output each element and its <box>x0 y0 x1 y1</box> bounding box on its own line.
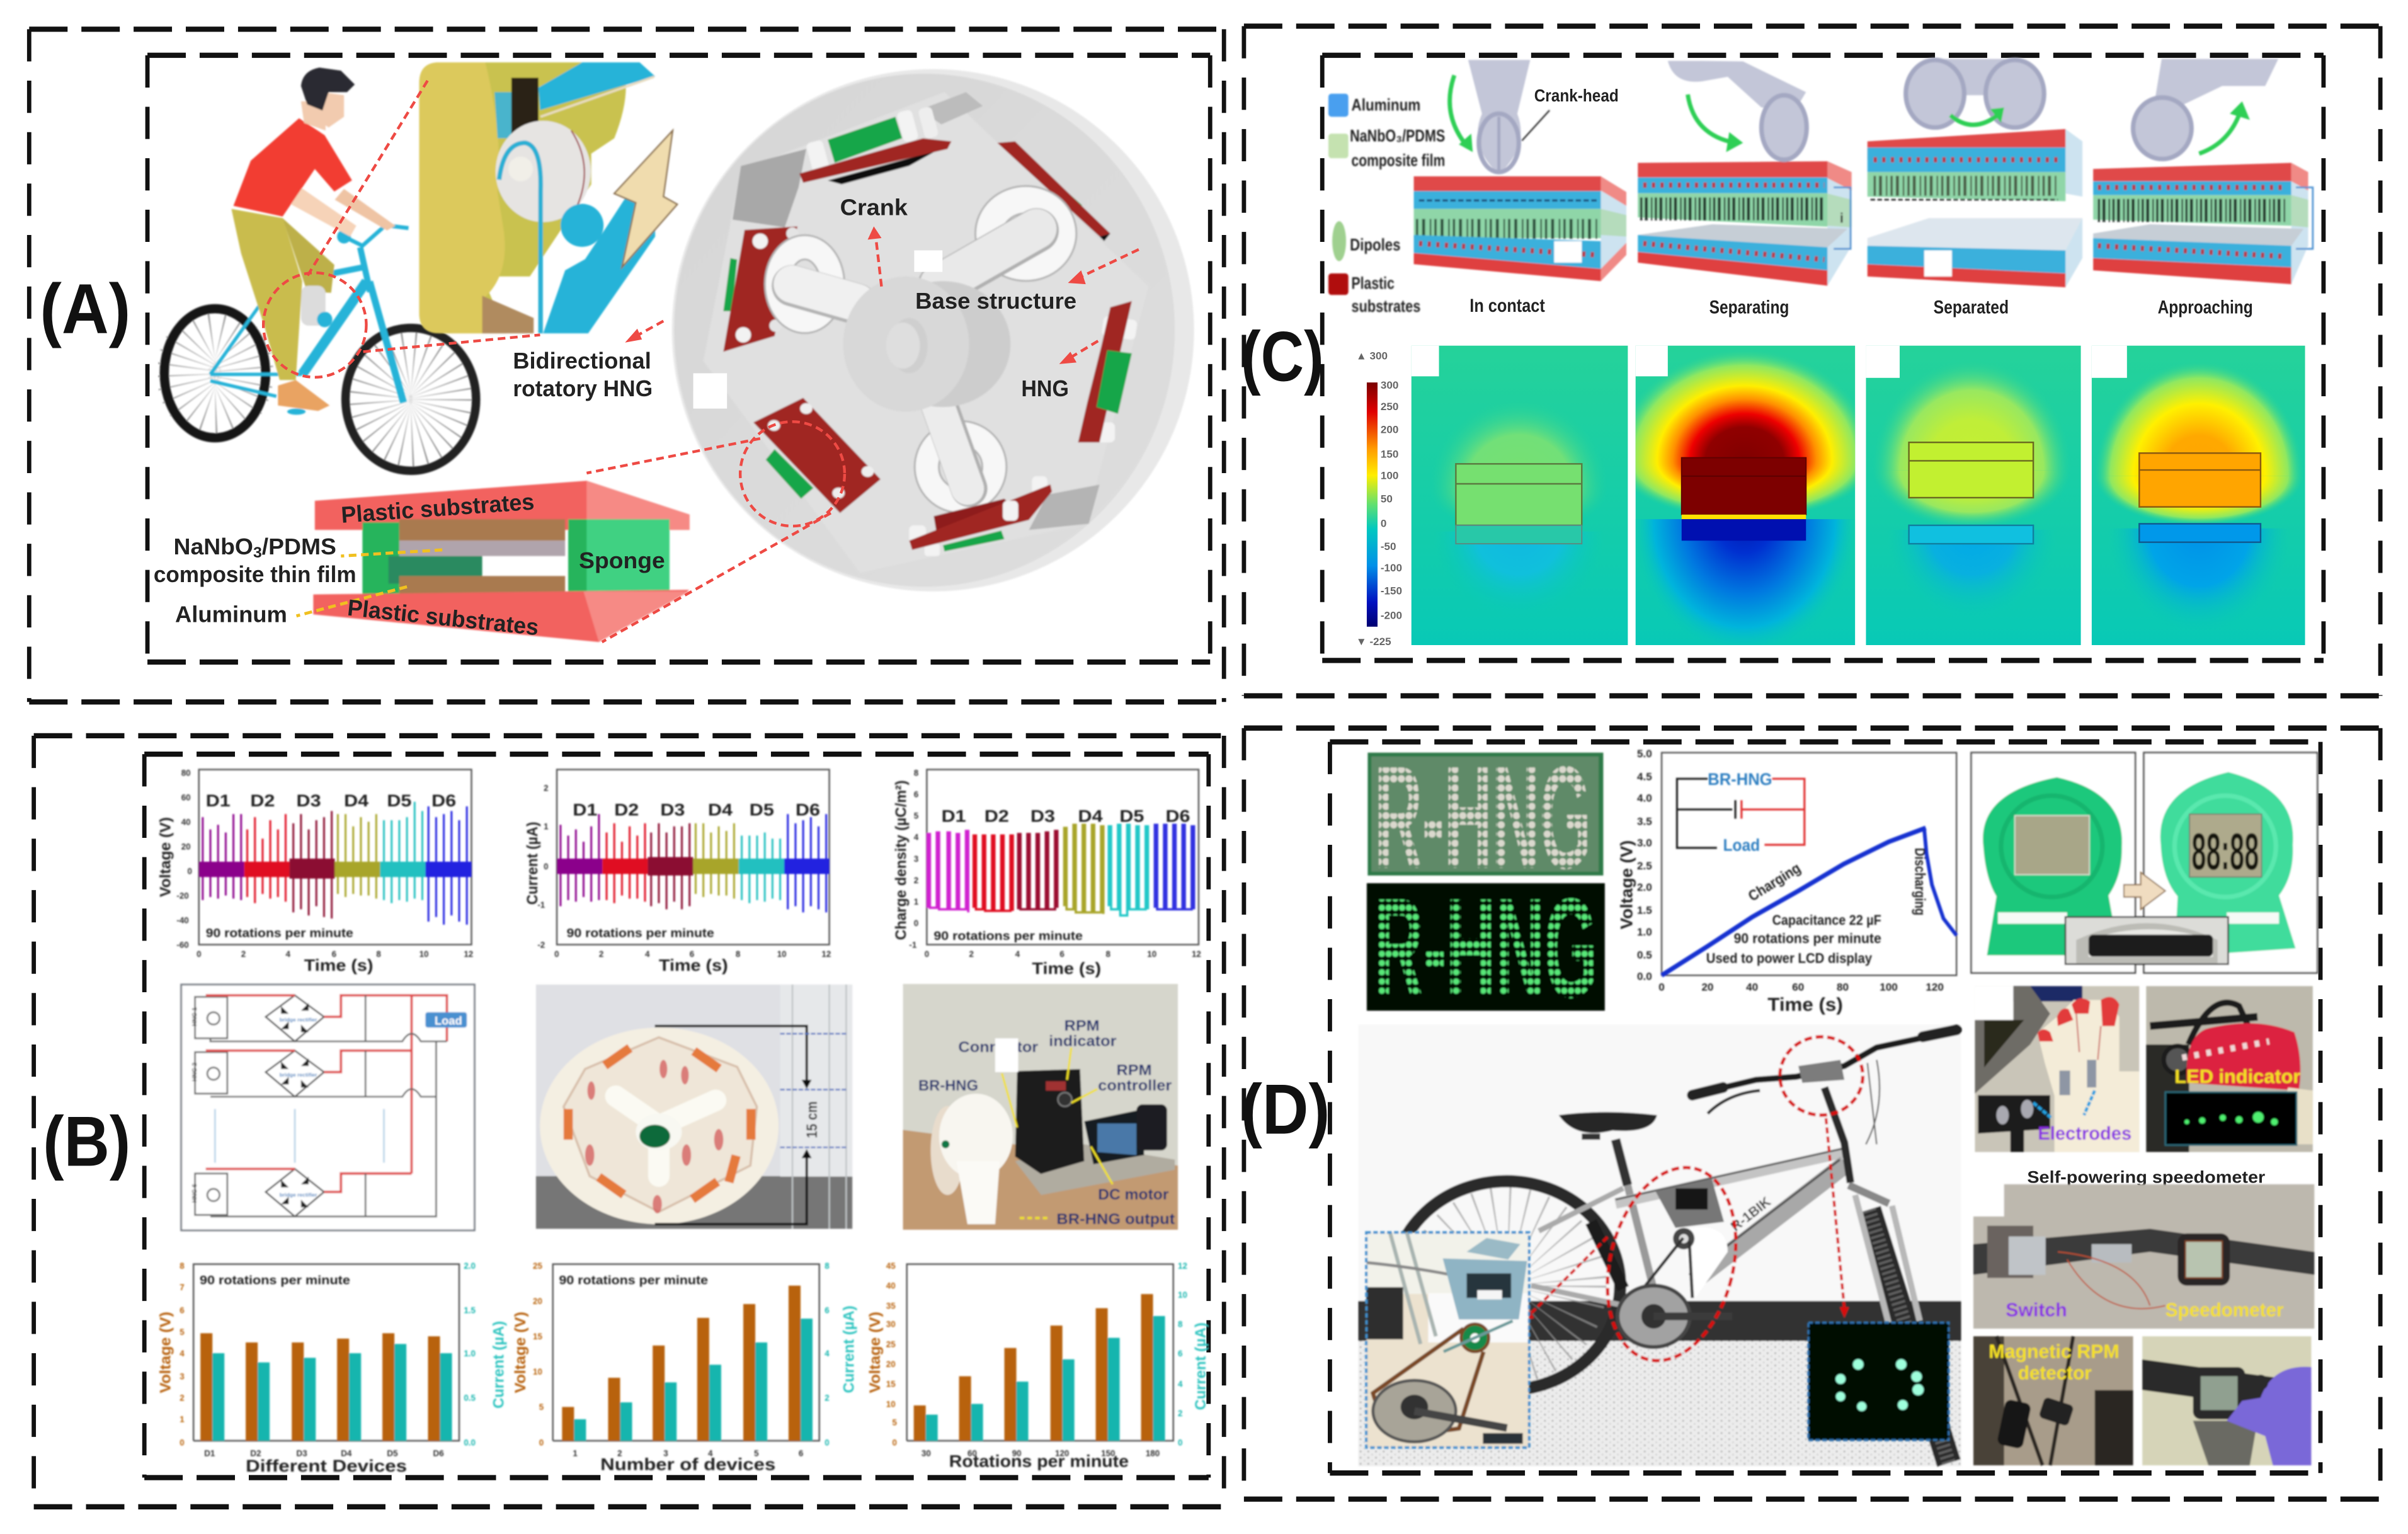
bar chart: voltage and current by device: D3 <box>297 1448 307 1458</box>
bar chart: voltage and current by number of devices: Current (µA) <box>841 1305 858 1393</box>
label: NaNbO3/PDMS composite thin film: NaNbO <box>174 534 251 559</box>
heading (A): (A) <box>40 269 130 348</box>
bar chart: voltage and current by device: 0.5 <box>464 1394 476 1403</box>
bar chart: voltage and current by device: 2 <box>180 1394 185 1403</box>
chart: voltage of six devices <box>157 768 473 975</box>
photo: bicycle with mounted device: R-1BIK <box>1728 1194 1774 1234</box>
photo: test rig with motor and labels: BR-HNG <box>918 1077 978 1094</box>
chart: voltage of six devices: 10 <box>419 949 429 959</box>
bar chart: voltage and current by rotation speed: 120 <box>1055 1448 1069 1458</box>
bar chart: voltage and current by device: 6 <box>180 1306 185 1315</box>
chart: current of six devices: 2 <box>544 784 549 793</box>
bar chart: voltage and current by device: 5 <box>180 1327 185 1337</box>
illustration: rotary disc with crank and HNG modules <box>672 69 1194 592</box>
photo: LED board unlit <box>1367 736 1603 900</box>
heading (C): (C) <box>1241 317 1324 396</box>
circuit diagram: six HNG rectifiers to load <box>181 985 474 1230</box>
bar chart: voltage and current by rotation speed: 2 <box>1178 1409 1183 1418</box>
chart: charge density of six devices: D2 <box>984 806 1009 825</box>
chart: voltage of six devices: 90 rotations per minute <box>206 926 353 940</box>
potential map: In contact <box>1412 346 1628 645</box>
bar chart: voltage and current by rotation speed: 4 <box>1178 1380 1183 1389</box>
chart: charge density of six devices: 4 <box>914 833 919 842</box>
inset: close-up of chain and device mount <box>1366 1232 1529 1448</box>
chart: charge density of six devices: D4 <box>1078 806 1103 825</box>
chart: charge density of six devices: 6 <box>1059 949 1064 959</box>
chart: voltage of six devices: 6 <box>332 949 336 959</box>
bar chart: voltage and current by device: Current (µA) <box>491 1321 508 1409</box>
bar chart: voltage and current by rotation speed: 8 <box>1178 1320 1183 1329</box>
chart: current of six devices: 8 <box>736 949 741 959</box>
bar chart: voltage and current by rotation speed: 25 <box>886 1339 896 1349</box>
chart: capacitor charging and discharging: 90 rotations per minute <box>1734 930 1881 946</box>
colour scale: 150 <box>1381 449 1398 461</box>
diagram: Separating state: i <box>1840 210 1844 226</box>
chart: capacitor charging and discharging: 20 <box>1701 982 1713 993</box>
potential map: Separated <box>1866 346 2081 645</box>
bar chart: voltage and current by number of devices: 8 <box>825 1261 830 1271</box>
chart: capacitor charging and discharging: 2.5 <box>1637 860 1652 872</box>
chart: voltage of six devices: D5 <box>387 791 412 810</box>
chart: current of six devices: D1 <box>573 801 598 820</box>
chart: capacitor charging and discharging <box>1618 748 1956 1015</box>
legend: materials: composite film <box>1352 151 1445 169</box>
bar chart: voltage and current by device: 0.0 <box>464 1438 476 1447</box>
chart: capacitor charging and discharging: Discharging <box>1912 848 1928 915</box>
bar chart: voltage and current by number of devices: 0 <box>825 1438 830 1447</box>
legend: materials <box>1328 94 1445 316</box>
potential map: Separating <box>1635 345 1856 645</box>
chart: capacitor charging and discharging: BR-HNG <box>1708 770 1772 789</box>
chart: voltage of six devices: 60 <box>181 793 191 802</box>
chart: voltage of six devices: Voltage (V) <box>157 817 174 897</box>
chart: current of six devices: 10 <box>777 949 787 959</box>
chart: charge density of six devices: 4 <box>1015 949 1020 959</box>
label: HNG: HNG <box>1021 375 1069 401</box>
chart: capacitor charging and discharging: Load <box>1723 836 1760 855</box>
bar chart: voltage and current by device: 1 <box>180 1415 185 1424</box>
chart: current of six devices: Time (s) <box>659 957 728 975</box>
bar chart: voltage and current by device: 1.0 <box>464 1349 476 1358</box>
bar chart: voltage and current by rotation speed: 15 <box>886 1380 896 1389</box>
panel C inner frame <box>1322 55 2324 660</box>
chart: voltage of six devices: D4 <box>344 791 368 810</box>
bar chart: voltage and current by number of devices: 0 <box>539 1438 544 1447</box>
legend: materials: NaNbO₃/PDMS <box>1350 126 1445 145</box>
chart: voltage of six devices: 8 <box>376 949 381 959</box>
photo: glove with electrodes <box>1975 986 2139 1152</box>
chart: voltage of six devices: -60 <box>176 940 189 949</box>
chart: charge density of six devices: 2 <box>914 876 918 885</box>
connector lines and arrows <box>263 81 1139 642</box>
photo: test rig with motor and labels: RPM <box>1064 1017 1100 1034</box>
module: HNG bottom <box>909 476 1052 556</box>
illustration: sandwich layer cross-section <box>313 481 690 642</box>
chart: current of six devices: 0 <box>554 949 559 959</box>
bar chart: voltage and current by device: 8 <box>180 1261 185 1271</box>
chart: charge density of six devices: -1 <box>909 940 917 949</box>
label: Bidirectional rotatory HNG <box>513 348 653 401</box>
chart: voltage of six devices: 0 <box>197 949 202 959</box>
chart: voltage of six devices: 80 <box>181 768 191 777</box>
chart: voltage of six devices: 2 <box>241 949 246 959</box>
bar chart: voltage and current by number of devices: 1 <box>573 1448 578 1458</box>
photo: test rig with motor and labels: controller <box>1098 1077 1172 1094</box>
bar chart: voltage and current by rotation speed: 60 <box>967 1448 977 1458</box>
bar chart: voltage and current by device: 4 <box>180 1349 185 1358</box>
colour scale <box>1356 350 1402 648</box>
legend: materials: substrates <box>1352 297 1420 316</box>
module: HNG left <box>723 226 799 352</box>
heading (B): (B) <box>43 1102 130 1181</box>
chart: charge density of six devices: 5 <box>914 811 919 821</box>
bar chart: voltage and current by rotation speed: Voltage (V) <box>867 1312 884 1393</box>
label: NaNbO3/PDMS composite thin film: 3 <box>253 544 262 561</box>
circuit diagram: six HNG rectifiers to load: HNG 2 <box>191 1062 198 1081</box>
chart: current of six devices: 12 <box>821 949 831 959</box>
bar chart: voltage and current by number of devices: 25 <box>533 1261 542 1271</box>
bar chart: voltage and current by rotation speed: 90 <box>1012 1448 1022 1458</box>
chart: capacitor charging and discharging: 1.0 <box>1637 926 1652 938</box>
colour scale: -50 <box>1381 541 1396 552</box>
photo: magnetic RPM detector <box>1973 1336 2133 1465</box>
photo: test rig with motor and labels: BR-HNG output <box>1056 1211 1175 1228</box>
bar chart: voltage and current by number of devices: 2 <box>617 1448 622 1458</box>
label: NaNbO3/PDMS composite thin film <box>154 534 357 587</box>
bar chart: voltage and current by device: D6 <box>433 1448 444 1458</box>
bar chart: voltage and current by number of devices: 4 <box>825 1349 830 1358</box>
panel D: applications <box>1241 728 2380 1499</box>
panel A: bicycle device concept <box>29 29 1224 702</box>
chart: charge density of six devices: 10 <box>1147 949 1156 959</box>
bar chart: voltage and current by rotation speed: 0 <box>893 1438 897 1447</box>
chart: charge density of six devices: 12 <box>1192 949 1201 959</box>
photo: magnetic RPM detector: Magnetic RPM <box>1989 1341 2120 1362</box>
chart: capacitor charging and discharging: 0.0 <box>1637 971 1652 983</box>
chart: charge density of six devices: 2 <box>969 949 974 959</box>
chart: capacitor charging and discharging: 3.0 <box>1637 837 1652 849</box>
chart: capacitor charging and discharging: 60 <box>1792 982 1804 993</box>
photo: test rig with motor and labels: DC motor <box>1098 1186 1169 1203</box>
diagram: In contact state <box>1414 60 1626 281</box>
bar chart: voltage and current by rotation speed: 40 <box>886 1281 896 1291</box>
potential map: Approaching <box>2092 346 2305 645</box>
circuit diagram: six HNG rectifiers to load: HNG 1 <box>191 1007 198 1026</box>
bar chart: voltage and current by number of devices: 6 <box>799 1448 803 1458</box>
bar chart: voltage and current by device: 2.0 <box>464 1261 476 1271</box>
chart: voltage of six devices: 40 <box>181 817 191 827</box>
photo: glove with LED indicator: LED indicator <box>2174 1066 2300 1087</box>
chart: capacitor charging and discharging: Capacitance 22 µF <box>1772 912 1881 928</box>
chart: capacitor charging and discharging: 2.0 <box>1637 881 1652 893</box>
circuit diagram: six HNG rectifiers to load: bridge rectifier <box>280 1016 317 1022</box>
panel C: working mechanism and potential simulation <box>1241 26 2380 695</box>
label: Base structure: Base structure <box>915 288 1076 314</box>
panel B: electrical output characterisation <box>34 736 1224 1507</box>
bar chart: voltage and current by rotation speed: Current (µA) <box>1192 1322 1209 1410</box>
bar chart: voltage and current by device: D4 <box>341 1448 352 1458</box>
circuit diagram: six HNG rectifiers to load: bridge rectifier <box>280 1072 317 1078</box>
diagram: Separated state <box>1868 59 2082 287</box>
label: Separating: Separating <box>1709 297 1789 318</box>
chart: voltage of six devices: 12 <box>464 949 473 959</box>
bar chart: voltage and current by device: 0 <box>180 1438 185 1447</box>
chart: charge density of six devices: D1 <box>942 806 966 825</box>
chart: current of six devices: 1 <box>544 822 549 832</box>
colour scale: ▼ -225 <box>1356 636 1391 648</box>
photo: speedometer on handlebar: Switch <box>2006 1300 2067 1321</box>
chart: current of six devices: D5 <box>750 801 774 820</box>
photo: test rig with motor and labels: indicator <box>1049 1033 1117 1050</box>
label: In contact: In contact <box>1469 296 1545 316</box>
label: Aluminum: Aluminum <box>175 601 287 627</box>
diagram: Separating state <box>1638 61 1852 286</box>
panel D: applications: R-HNG <box>1374 736 1591 900</box>
chart: charge density of six devices: 0 <box>914 919 918 928</box>
module: HNG upper right <box>997 141 1110 241</box>
colour scale: 300 <box>1381 379 1398 391</box>
colour scale: ▲ 300 <box>1356 350 1388 362</box>
label: Crank: Crank <box>840 194 908 220</box>
chart: charge density of six devices <box>893 768 1201 978</box>
crank: three-armed hub with rollers <box>777 200 1063 501</box>
photo: bicycle with mounted device <box>1359 1024 1961 1466</box>
chart: voltage of six devices: 4 <box>285 949 290 959</box>
bar chart: voltage and current by rotation speed: 12 <box>1178 1261 1187 1271</box>
bar chart: voltage and current by number of devices: 5 <box>539 1402 544 1412</box>
bar chart: voltage and current by device: D5 <box>387 1448 398 1458</box>
bar chart: voltage and current by rotation speed: 150 <box>1101 1448 1115 1458</box>
bar chart: voltage and current by rotation speed: 6 <box>1178 1349 1183 1358</box>
photo: test rig with motor and labels <box>903 984 1178 1230</box>
chart: voltage of six devices: D2 <box>250 791 275 810</box>
bar chart: voltage and current by rotation speed: 180 <box>1146 1448 1160 1458</box>
circuit diagram: six HNG rectifiers to load: Load <box>435 1014 462 1027</box>
chart: voltage of six devices: 20 <box>181 842 191 851</box>
label: Bidirectional rotatory HNG: rotatory HNG <box>513 375 653 401</box>
legend: materials: Dipoles <box>1350 235 1401 254</box>
bar chart: voltage and current by number of devices: 5 <box>754 1448 759 1458</box>
chart: capacitor charging and discharging: 80 <box>1837 982 1849 993</box>
chart: voltage of six devices: D1 <box>206 791 231 810</box>
legend: materials: Plastic <box>1352 273 1395 292</box>
label: NaNbO3/PDMS composite thin film: composite thin film <box>154 561 357 587</box>
chart: capacitor charging and discharging: 120 <box>1926 982 1944 993</box>
chart: charge density of six devices: 8 <box>1105 949 1110 959</box>
white mask patches <box>693 250 942 409</box>
photo: speedometer on handlebar: Speedometer <box>2165 1300 2284 1321</box>
bar chart: voltage and current by device: 90 rotations per minute <box>200 1273 350 1287</box>
bar chart: voltage and current by number of devices: 3 <box>663 1448 668 1458</box>
chart: capacitor charging and discharging: 3.5 <box>1637 815 1652 827</box>
photo: LCD display off and on: 88:88 <box>2191 822 2259 881</box>
inset: eight LEDs lit on handlebar <box>1808 1322 1949 1440</box>
chart: current of six devices: 2 <box>599 949 603 959</box>
chart: capacitor charging and discharging: 40 <box>1746 982 1758 993</box>
label: Self-powering speedometer: Self-powering speedometer <box>2027 1167 2266 1186</box>
bar chart: voltage and current by number of devices: 10 <box>533 1367 542 1377</box>
photo: glove with electrodes: Electrodes <box>2038 1124 2131 1144</box>
label: NaNbO3/PDMS composite thin film: /PDMS <box>262 534 336 559</box>
label: Plastic substrates top: Plastic substrates <box>340 489 535 528</box>
bar chart: voltage and current by rotation speed: 45 <box>886 1261 896 1271</box>
photo: glove with LED indicator <box>2146 986 2313 1152</box>
chart: charge density of six devices: Time (s) <box>1032 960 1101 978</box>
panel B outer frame <box>34 736 1224 1507</box>
chart: capacitor charging and discharging: 4.0 <box>1637 793 1652 804</box>
colour scale: 0 <box>1381 517 1386 529</box>
photo: speedometer on handlebar <box>1973 1184 2314 1329</box>
chart: capacitor charging and discharging: 0.5 <box>1637 949 1652 961</box>
bar chart: voltage and current by device: Different Devices <box>246 1457 407 1475</box>
chart: current of six devices: -1 <box>537 900 545 910</box>
label: Sponge: Sponge <box>579 547 665 573</box>
bar chart: voltage and current by number of devices <box>512 1261 858 1474</box>
heading (D): (D) <box>1241 1069 1330 1148</box>
bar chart: voltage and current by rotation speed: 0 <box>1178 1438 1183 1447</box>
bar chart: voltage and current by device: 3 <box>180 1371 185 1381</box>
chart: current of six devices: 6 <box>690 949 694 959</box>
photo: test rig with motor and labels: Connector <box>958 1039 1039 1056</box>
colour scale: 200 <box>1381 424 1398 436</box>
chart: current of six devices <box>524 770 831 975</box>
chart: charge density of six devices: D5 <box>1119 806 1144 825</box>
bar chart: voltage and current by number of devices: 4 <box>708 1448 713 1458</box>
bar chart: voltage and current by number of devices: Number of devices <box>600 1455 775 1474</box>
chart: voltage of six devices: 0 <box>187 866 192 876</box>
panel D: applications: R-HNG <box>1374 869 1597 1027</box>
label: Plastic substrates bottom: Plastic substrates <box>346 595 540 640</box>
chart: charge density of six devices: 90 rotations per minute <box>933 929 1083 943</box>
chart: current of six devices: 4 <box>645 949 650 959</box>
bar chart: voltage and current by number of devices: 15 <box>533 1332 542 1341</box>
chart: charge density of six devices: 8 <box>914 768 919 777</box>
bar chart: voltage and current by rotation speed: 30 <box>922 1448 931 1458</box>
bar chart: voltage and current by rotation speed: 35 <box>886 1301 896 1310</box>
chart: capacitor charging and discharging: 5.0 <box>1637 748 1652 760</box>
chart: voltage of six devices: Time (s) <box>304 957 373 975</box>
circuit diagram: six HNG rectifiers to load: HNG 6 <box>191 1184 198 1203</box>
circuit diagram: six HNG rectifiers to load: bridge rectifier <box>280 1191 317 1198</box>
chart: capacitor charging and discharging: 100 <box>1880 982 1898 993</box>
label: Bidirectional rotatory HNG: Bidirectional <box>513 348 651 374</box>
bar chart: voltage and current by device <box>157 1261 508 1475</box>
chart: charge density of six devices: D6 <box>1166 806 1190 825</box>
chart: current of six devices: Current (µA) <box>524 821 541 905</box>
module: HNG right <box>1078 301 1138 442</box>
label: Separated: Separated <box>1934 297 2009 318</box>
module: HNG top <box>799 106 951 185</box>
photo: LED board lit <box>1367 869 1605 1027</box>
photo: magnetic RPM detector: detector <box>2018 1362 2092 1383</box>
chart: capacitor charging and discharging: Charging <box>1745 859 1803 904</box>
photo: test rig with motor and labels: RPM <box>1117 1062 1152 1079</box>
chart: charge density of six devices: 6 <box>914 789 918 799</box>
chart: current of six devices: D3 <box>660 801 685 820</box>
bar chart: voltage and current by rotation speed: 10 <box>886 1399 896 1409</box>
chart: capacitor charging and discharging: 1.5 <box>1637 905 1652 917</box>
panel D inner frame <box>1330 742 2320 1473</box>
module: HNG lower left <box>753 398 881 513</box>
chart: voltage of six devices: D3 <box>297 791 321 810</box>
panel D outer frame <box>1244 728 2380 1499</box>
chart: charge density of six devices: 3 <box>914 854 918 864</box>
chart: capacitor charging and discharging: 4.5 <box>1637 771 1652 783</box>
panel A outer frame <box>29 29 1224 702</box>
chart: current of six devices: -2 <box>537 940 545 949</box>
chart: charge density of six devices: D3 <box>1030 806 1055 825</box>
legend: materials: Aluminum <box>1352 96 1420 115</box>
chart: charge density of six devices: 0 <box>925 949 929 959</box>
colour scale: 100 <box>1381 470 1398 482</box>
photo: assembled rotary HNG with 15 cm scale: 15 cm <box>804 1101 821 1138</box>
chart: current of six devices: D6 <box>796 801 820 820</box>
illustration: cyclist on bicycle <box>164 67 476 471</box>
bar chart: voltage and current by device: 7 <box>180 1283 185 1292</box>
chart: current of six devices: D2 <box>614 801 639 820</box>
bar chart: voltage and current by rotation speed: 30 <box>886 1320 896 1329</box>
bar chart: voltage and current by rotation speed: 10 <box>1178 1290 1187 1300</box>
panel C outer frame <box>1244 26 2380 695</box>
chart: capacitor charging and discharging: Voltage (V) <box>1618 840 1636 929</box>
photo: LCD display off and on <box>1971 753 2317 973</box>
colour scale: -100 <box>1381 562 1402 574</box>
colour scale: -150 <box>1381 585 1402 597</box>
chart: charge density of six devices: 1 <box>914 897 919 907</box>
photo: speedometer with purple glove <box>2142 1336 2311 1465</box>
bar chart: voltage and current by device: D1 <box>204 1448 215 1458</box>
panel A inner frame <box>147 55 1210 662</box>
chart: capacitor charging and discharging: 0 <box>1658 982 1665 993</box>
bar chart: voltage and current by device: 1.5 <box>464 1306 476 1315</box>
chart: voltage of six devices: D6 <box>431 791 456 810</box>
bar chart: voltage and current by number of devices: Voltage (V) <box>512 1312 529 1393</box>
chart: capacitor charging and discharging: Time (s) <box>1767 995 1843 1015</box>
chart: current of six devices: 90 rotations per minute <box>567 926 714 940</box>
chart: voltage of six devices: -20 <box>176 891 189 900</box>
colour scale: -200 <box>1381 610 1402 622</box>
colour scale: 50 <box>1381 493 1393 505</box>
photo: assembled rotary HNG with 15 cm scale <box>536 985 852 1229</box>
chart: capacitor charging and discharging: Used to power LCD display <box>1706 951 1873 966</box>
bar chart: voltage and current by rotation speed: 20 <box>886 1359 896 1369</box>
bar chart: voltage and current by rotation speed: 5 <box>893 1418 898 1428</box>
chart: voltage of six devices: -40 <box>176 915 189 925</box>
chart: charge density of six devices: Charge density (µC/m²) <box>893 781 910 940</box>
chart: current of six devices: D4 <box>708 801 733 820</box>
bar chart: voltage and current by device: Voltage (V) <box>157 1312 174 1393</box>
bar chart: voltage and current by number of devices: 20 <box>533 1296 542 1306</box>
bar chart: voltage and current by rotation speed: Rotations per minute <box>949 1451 1129 1470</box>
inset: zoomed HNG mounted on bicycle <box>419 62 677 333</box>
bar chart: voltage and current by device: D2 <box>250 1448 261 1458</box>
diagram: Approaching state <box>2093 59 2313 284</box>
bar chart: voltage and current by number of devices: 2 <box>825 1394 830 1403</box>
bar chart: voltage and current by number of devices: 6 <box>825 1306 830 1315</box>
bar chart: voltage and current by number of devices: 90 rotations per minute <box>559 1273 708 1287</box>
label: Approaching: Approaching <box>2158 297 2253 318</box>
colour scale: 250 <box>1381 401 1398 413</box>
panel B inner frame <box>144 754 1209 1478</box>
label: Crank-head: Crank-head <box>1534 86 1619 105</box>
bar chart: voltage and current by rotation speed <box>867 1261 1209 1470</box>
chart: current of six devices: 0 <box>544 862 549 871</box>
